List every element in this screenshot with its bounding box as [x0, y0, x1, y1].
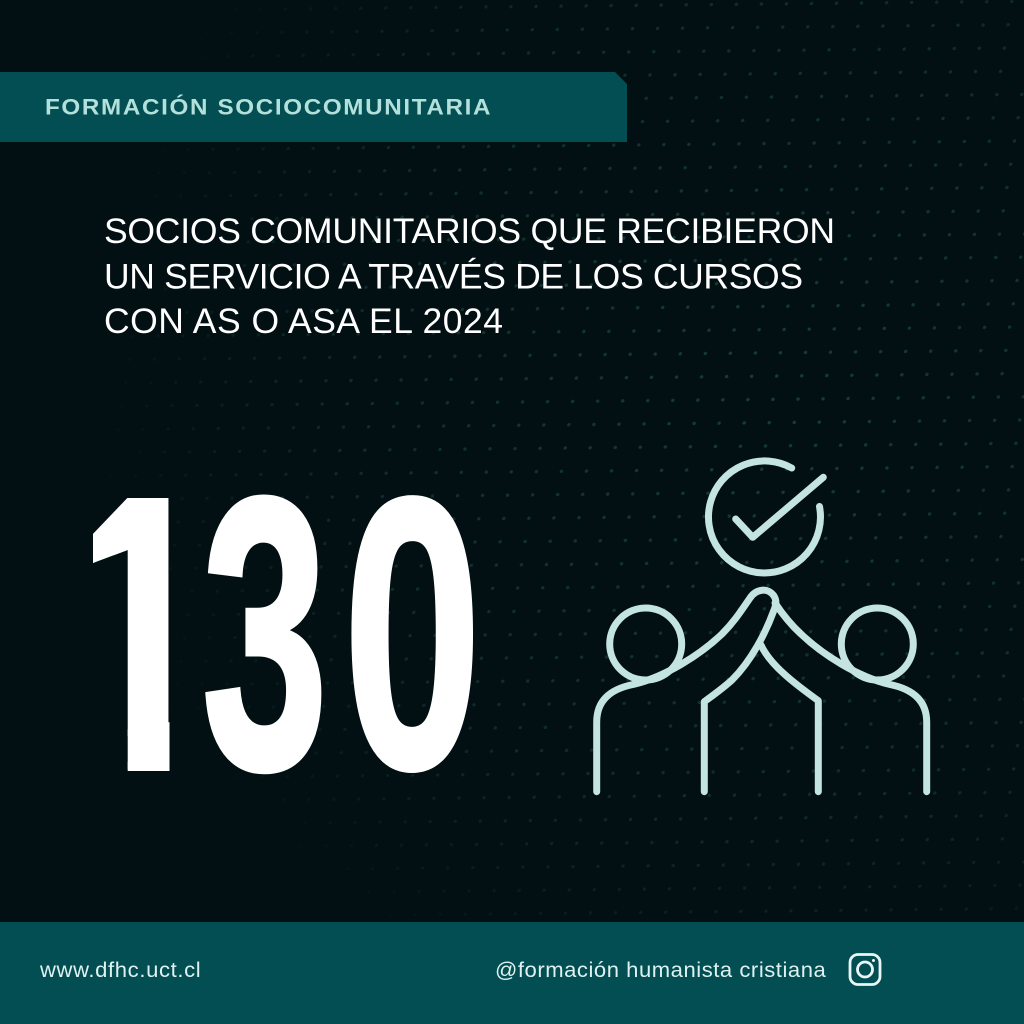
icon: instagram — [850, 954, 880, 984]
website: www.dfhc.uct.cl — [39, 958, 201, 982]
banner label: FORMACIÓN SOCIOCOMUNITARIA — [45, 94, 491, 119]
title text block: SOCIOS COMUNITARIOS QUE RECIBIERON — [104, 211, 835, 251]
title text block — [104, 211, 835, 341]
big number 130: 0 — [343, 418, 482, 849]
icon: two people high five with check mark — [597, 461, 927, 792]
title text block: CON AS O ASA EL 2024 — [104, 301, 503, 341]
header banner — [0, 72, 627, 142]
icon: check circle — [708, 461, 823, 573]
footer background — [0, 922, 1024, 1024]
footer bar — [0, 922, 1024, 1024]
big number 130: 3 — [202, 419, 328, 850]
icon: left person — [597, 590, 776, 792]
social handle: @formación humanista cristiana — [495, 958, 826, 982]
big number 130: 1 — [74, 416, 209, 852]
big number 130 — [93, 494, 473, 774]
banner background — [0, 72, 627, 142]
icon: right person — [761, 603, 927, 792]
title text block: UN SERVICIO A TRAVÉS DE LOS CURSOS — [104, 256, 803, 296]
